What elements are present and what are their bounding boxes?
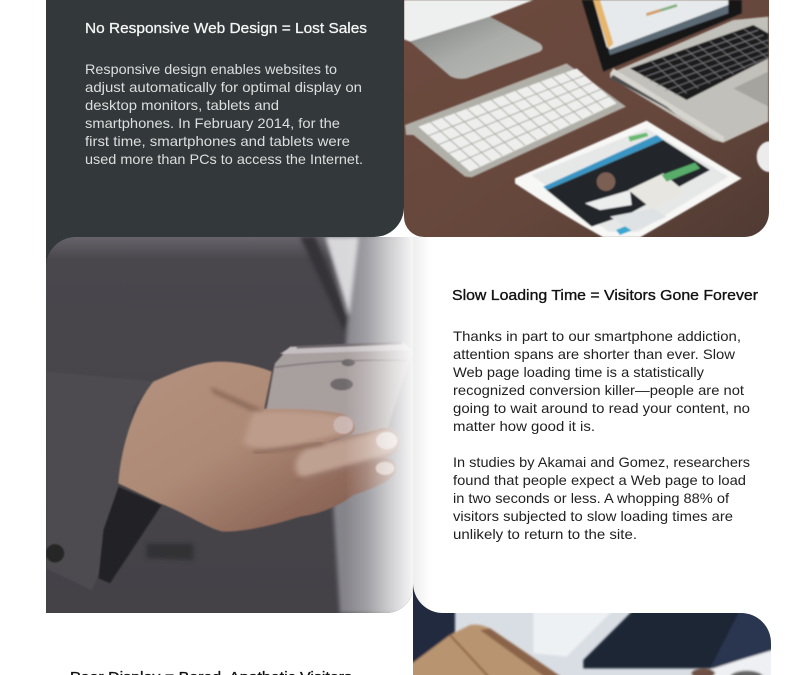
photo: devices on desk [404, 0, 782, 237]
text block: responsive design: used more than PCs to access the Internet. [85, 151, 363, 167]
icon: smartphone [263, 341, 413, 435]
text block: akamai and gomez studies: found that people expect a Web page to load [453, 472, 746, 488]
text block: attention spans: Web page loading time is a statistically [453, 364, 704, 380]
text block: attention spans [453, 328, 750, 434]
text block: responsive design: Responsive design enables websites to [85, 61, 337, 77]
text block: attention spans: attention spans are shorter than ever. Slow [453, 346, 736, 362]
icon: hand [118, 362, 400, 532]
heading: no responsive design: No Responsive Web Design = Lost Sales [85, 20, 367, 37]
icon: sleeve cuff [46, 473, 162, 588]
heading: slow loading time: Slow Loading Time = Visitors Gone Forever [452, 287, 758, 304]
text block: attention spans: going to wait around to read your content, no [453, 400, 750, 416]
text block: responsive design: adjust automatically for optimal display on [85, 79, 362, 95]
text block: akamai and gomez studies: visitors subjected to slow loading times are [453, 508, 733, 524]
photo: man holding smartphone [46, 237, 415, 613]
text block: attention spans: Thanks in part to our smartphone addiction, [453, 328, 741, 344]
text block: akamai and gomez studies: In studies by Akamai and Gomez, researchers [453, 454, 750, 470]
text block: responsive design: desktop monitors, tablets and [85, 97, 279, 113]
text block: attention spans: matter how good it is. [453, 418, 595, 434]
icon: fist [413, 623, 544, 675]
text block: responsive design [85, 61, 363, 167]
icon: jacket [147, 237, 415, 613]
panel: responsive web design [46, 0, 404, 275]
icon: wireless keyboard [405, 63, 626, 177]
text block: akamai and gomez studies: unlikely to return to the site. [453, 526, 637, 542]
text block: responsive design: first time, smartphones and tablets were [85, 133, 350, 149]
background shirt and suit [410, 573, 455, 665]
panel: slow loading time [413, 237, 771, 613]
photo: hands on desk, cropped [413, 584, 771, 675]
icon: tablet with website [515, 121, 742, 237]
icon: monitor and stand [404, 0, 542, 79]
text block: akamai and gomez studies [453, 454, 750, 542]
text block: akamai and gomez studies: in two seconds or less. A whopping 88% of [453, 490, 729, 506]
icon: laptop [582, 0, 768, 143]
text block: responsive design: smartphones. In February 2014, for the [85, 115, 340, 131]
text block: attention spans: recognized conversion killer—people are not [453, 382, 744, 398]
icon: mouse [756, 140, 769, 173]
